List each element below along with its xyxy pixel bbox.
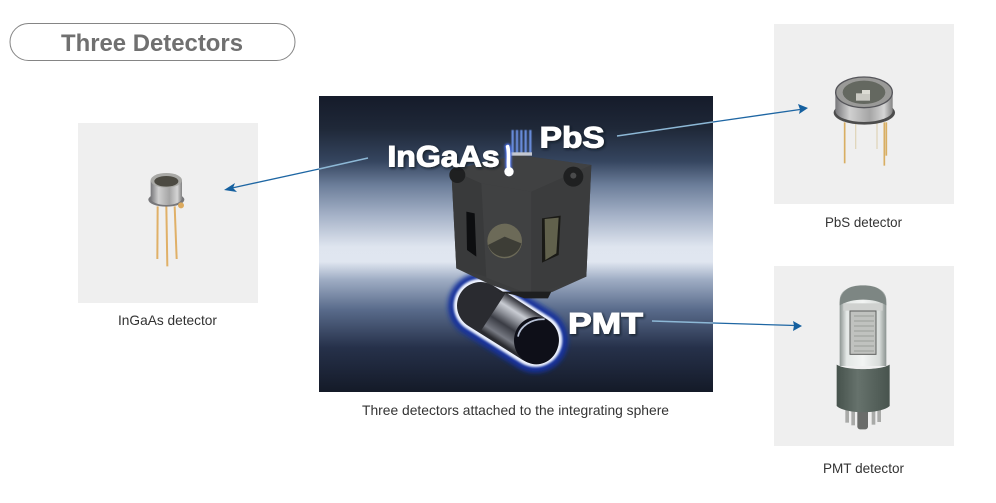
caption: PMT detector: PMT detector (823, 460, 904, 476)
arrow: InGaAs label to InGaAs detector (224, 158, 368, 192)
title (10, 24, 295, 60)
caption: integrating sphere: Three detectors attached to the integrating sphere (362, 402, 669, 418)
icon: detector cube (449, 155, 591, 298)
icon: PbS fiber bundle (511, 130, 532, 156)
label: PMT: PMT (568, 307, 643, 340)
panel: integrating sphere photo (319, 96, 713, 392)
title: Three Detectors (61, 30, 243, 57)
caption: InGaAs detector: InGaAs detector (118, 312, 217, 328)
panel: InGaAs detector photo (78, 123, 258, 303)
label: InGaAs: InGaAs (387, 141, 500, 174)
arrow: PMT label to PMT detector (652, 321, 802, 331)
arrow: PbS label to PbS detector (617, 104, 808, 136)
caption: PbS detector: PbS detector (825, 214, 902, 230)
icon: InGaAs glowing fiber (504, 147, 514, 176)
label: PbS: PbS (540, 122, 605, 155)
icon: PMT cylinder (481, 306, 559, 364)
panel: PMT detector photo (774, 266, 954, 446)
panel: PbS detector photo (774, 24, 954, 204)
